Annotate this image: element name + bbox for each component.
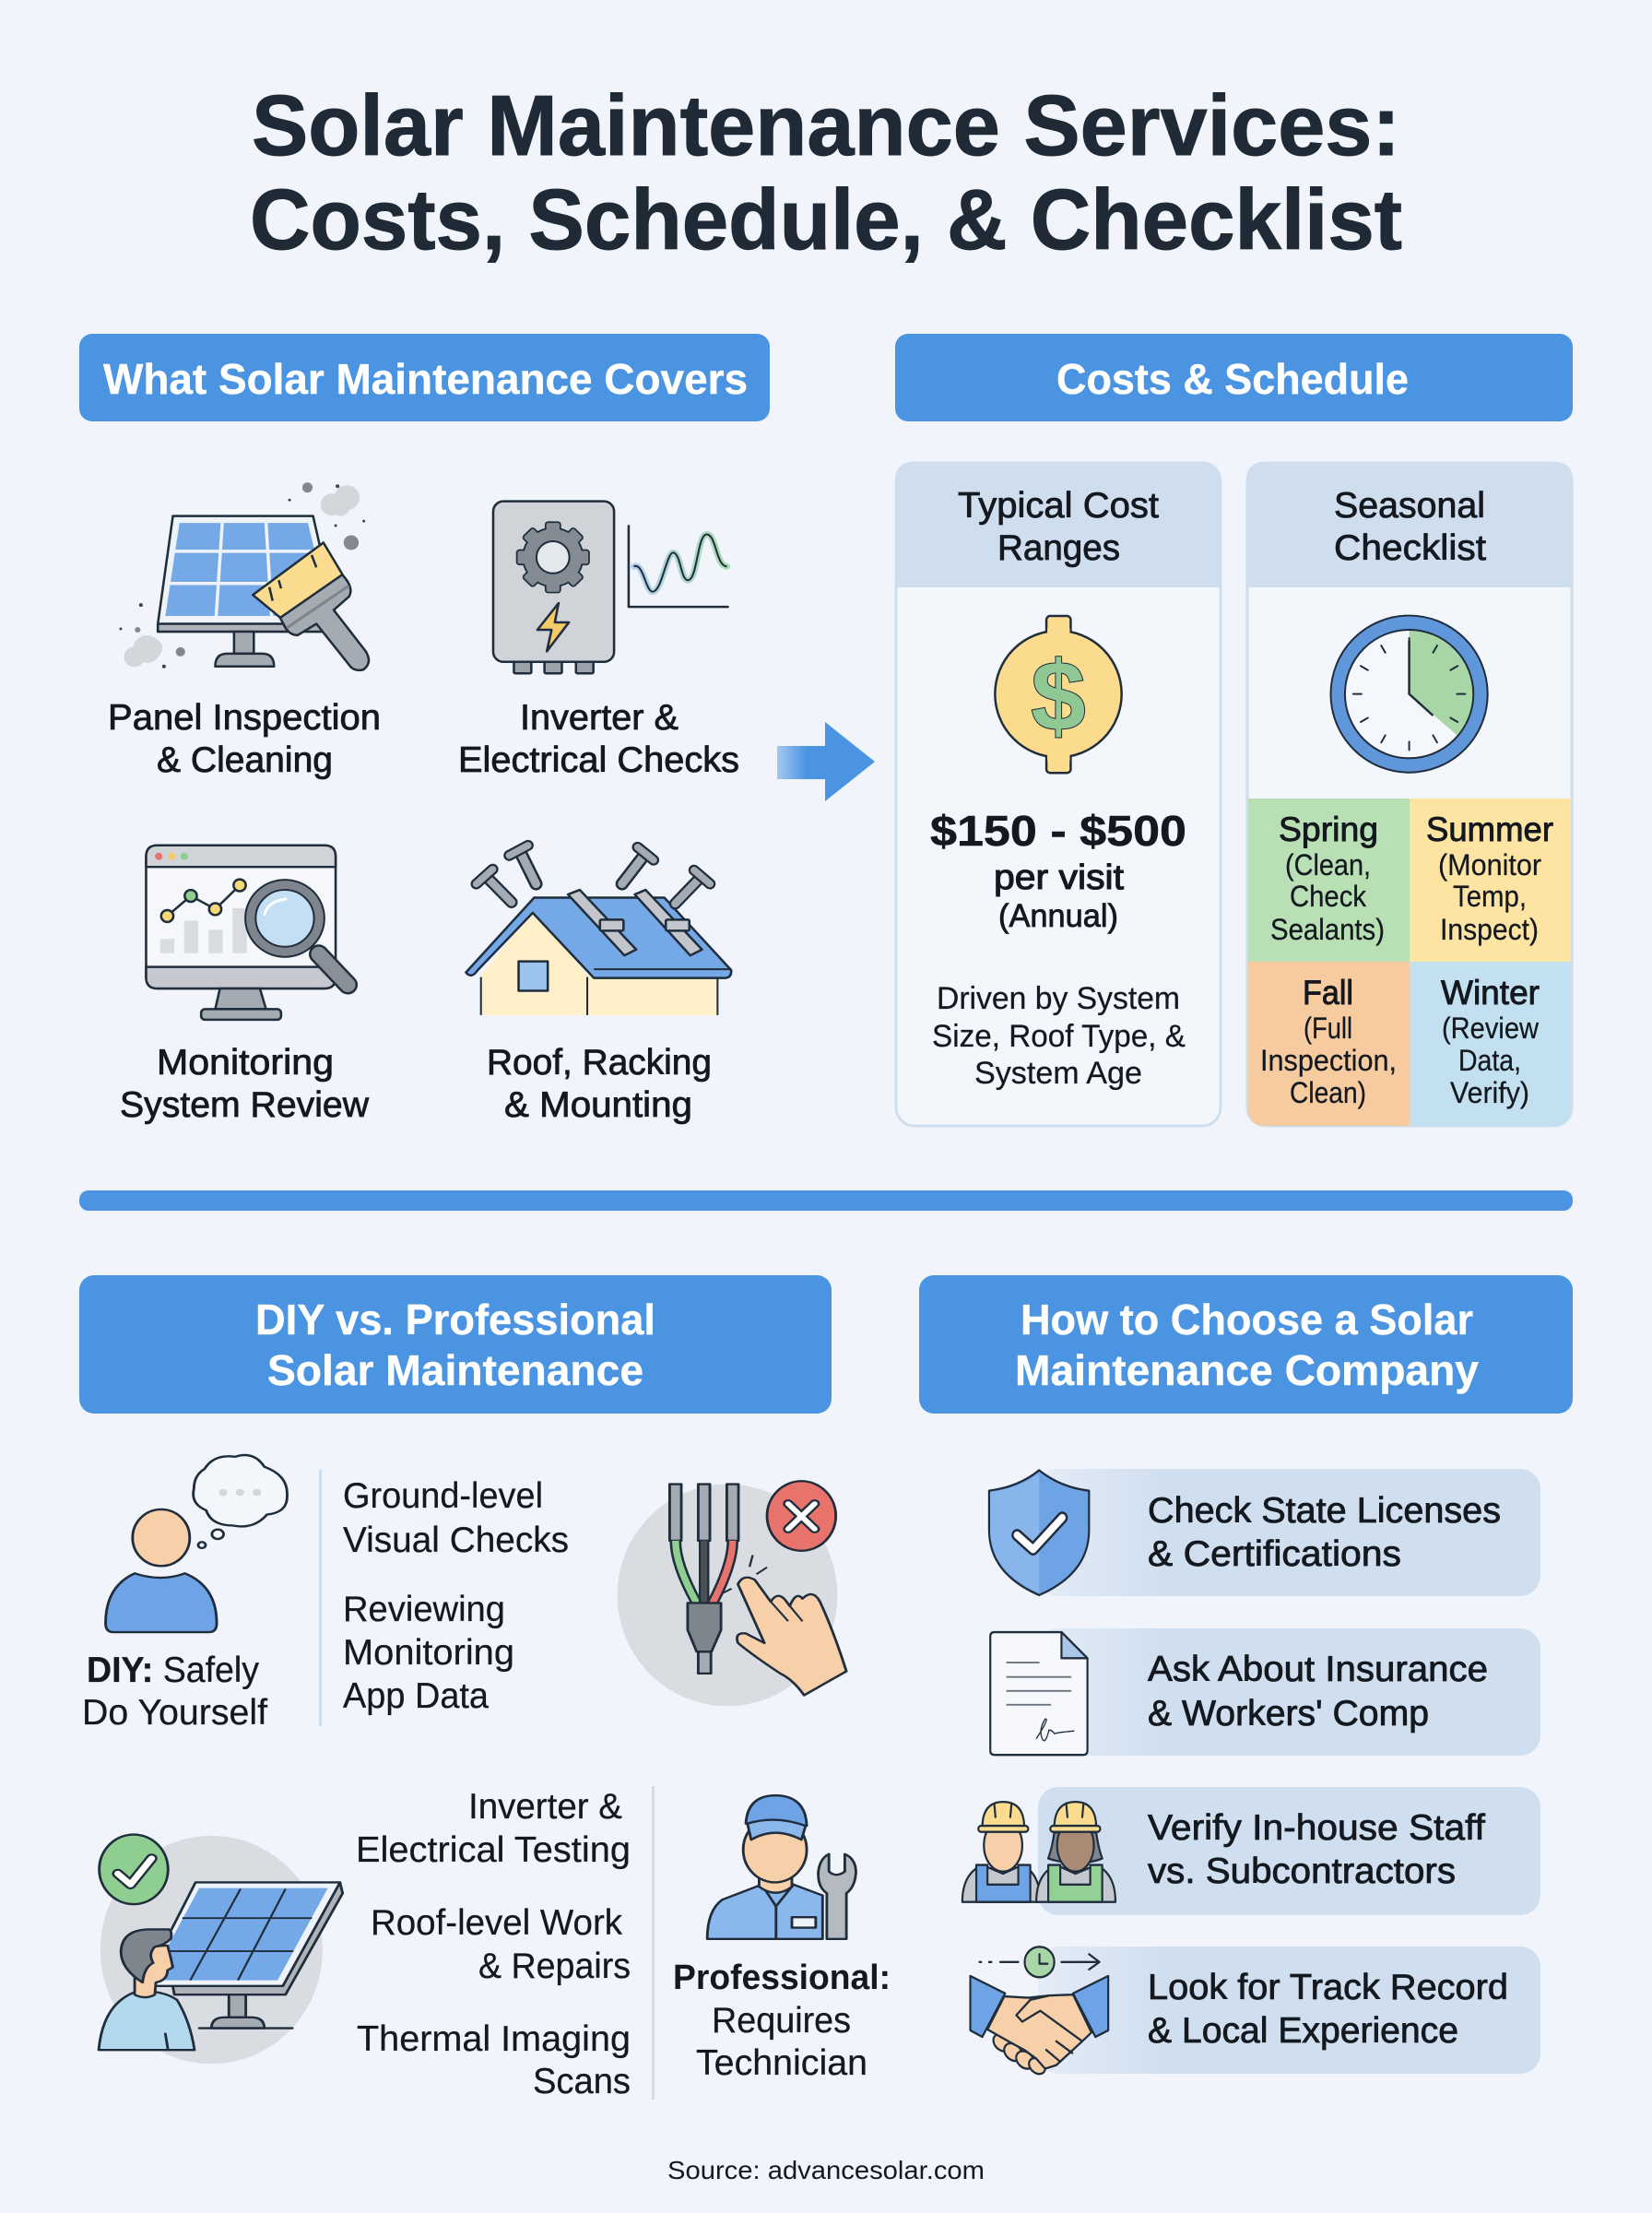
season: spring: (Clean, (1285, 848, 1371, 882)
season: spring: Sealants) (1270, 913, 1385, 946)
row: state licenses (989, 1469, 1540, 1596)
icon: dollar coin: $ (1031, 641, 1086, 751)
season: spring: Spring (1279, 811, 1378, 848)
heading: typical cost (958, 486, 1159, 568)
label: inverter checks: Inverter & (520, 698, 678, 738)
text: licenses (1148, 1491, 1501, 1574)
price (930, 807, 1186, 934)
row: staff (962, 1787, 1540, 1915)
list: diy tasks: Monitoring (343, 1633, 514, 1673)
source: Source: advancesolar.com (667, 2156, 985, 2184)
label: inverter checks (458, 698, 739, 780)
panel: seasonal checklist (1246, 462, 1573, 1126)
heading: how to choose: Maintenance Company (1015, 1346, 1479, 1394)
list: diy tasks: Ground-level (343, 1476, 543, 1516)
text: track record: & Local Experience (1148, 2011, 1458, 2051)
label: roof racking: Roof, Racking (487, 1043, 712, 1083)
heading: what solar maintenance covers (79, 334, 770, 421)
label: roof racking: & Mounting (504, 1085, 692, 1125)
title: Solar Maintenance Services: (252, 77, 1400, 173)
heading: costs and schedule (895, 334, 1573, 421)
list: professional tasks: Electrical Testing (356, 1830, 631, 1870)
cost drivers (932, 981, 1186, 1091)
heading: diy vs professional: DIY vs. Professional (255, 1296, 655, 1343)
heading: typical cost: Typical Cost (958, 486, 1159, 526)
list: professional tasks: & Repairs (478, 1947, 631, 1986)
text: staff: vs. Subcontractors (1148, 1852, 1456, 1891)
cost drivers: System Age (974, 1056, 1142, 1091)
text: licenses: Check State Licenses (1148, 1491, 1501, 1531)
heading: diy vs professional (79, 1275, 832, 1414)
label: inverter checks: Electrical Checks (458, 740, 739, 780)
label: monitoring review: System Review (120, 1085, 370, 1125)
list: professional tasks: Scans (533, 2062, 631, 2101)
heading: costs and schedule: Costs & Schedule (1056, 355, 1409, 403)
icon: roof with rails and screws (466, 846, 731, 1015)
icon: person checking panel (99, 1835, 343, 2064)
heading: how to choose: How to Choose a Solar (1021, 1296, 1473, 1343)
cost drivers: Size, Roof Type, & (932, 1019, 1186, 1054)
icon: person thinking (106, 1455, 287, 1632)
text: insurance: & Workers' Comp (1148, 1694, 1429, 1734)
list: diy tasks: Reviewing (343, 1590, 505, 1629)
icon: shield check (989, 1470, 1089, 1595)
label: panel inspection: & Cleaning (157, 740, 333, 780)
row: track record (971, 1947, 1540, 2077)
season: spring: Check (1290, 880, 1367, 913)
label: diy: DIY: Safely (87, 1651, 259, 1690)
text: track record: Look for Track Record (1148, 1968, 1508, 2007)
icon: technician with wrench (707, 1795, 856, 1939)
label: professional (673, 1959, 891, 2083)
season: winter: Winter (1441, 974, 1540, 1012)
label: monitoring review (120, 1043, 370, 1125)
season: summer: Summer (1426, 811, 1553, 848)
icon: wires and hand with x (618, 1481, 846, 1706)
text: insurance: Ask About Insurance (1148, 1650, 1488, 1689)
text: licenses: & Certifications (1148, 1534, 1401, 1574)
season: summer: Temp, (1453, 880, 1527, 913)
list: diy tasks (343, 1476, 569, 1716)
label: monitoring review: Monitoring (157, 1043, 334, 1083)
text: staff (1148, 1808, 1485, 1891)
icon: two workers (962, 1802, 1115, 1902)
heading: how to choose (919, 1275, 1573, 1414)
list: professional tasks: Inverter & (468, 1787, 622, 1827)
list: professional tasks (356, 1787, 631, 2101)
season: fall: (Full (1304, 1012, 1352, 1045)
season: winter (1410, 962, 1571, 1126)
season: summer: (Monitor (1438, 848, 1541, 882)
label: diy: Do Yourself (82, 1693, 267, 1733)
price: (Annual) (998, 898, 1118, 934)
row: insurance (990, 1628, 1540, 1756)
label: professional: Professional: (673, 1959, 891, 1997)
label: professional: Requires (712, 2001, 851, 2041)
list: professional tasks: Roof-level Work (371, 1903, 622, 1943)
season: fall: Inspection, (1260, 1044, 1397, 1077)
heading: seasonal: Seasonal (1334, 486, 1485, 526)
panel: what maintenance covers (108, 482, 739, 1125)
season: fall: Clean) (1290, 1076, 1366, 1109)
season: winter: (Review (1442, 1012, 1540, 1045)
heading: what solar maintenance covers: What Solar Maintenance Covers (103, 355, 748, 403)
icon: dollar coin (995, 616, 1122, 773)
panel: professional (99, 1786, 891, 2101)
text: track record (1148, 1968, 1508, 2051)
heading: typical cost: Ranges (997, 528, 1120, 568)
icon: handshake with timeline (971, 1947, 1108, 2077)
season: spring (1248, 799, 1410, 962)
season: winter: Data, (1458, 1044, 1521, 1077)
arrow (777, 722, 875, 801)
text: insurance (1148, 1650, 1488, 1734)
season: fall (1248, 962, 1410, 1126)
label: panel inspection (108, 698, 381, 780)
heading: seasonal: Checklist (1334, 528, 1486, 568)
price: $150 - $500 (930, 807, 1186, 855)
season: winter: Verify) (1450, 1076, 1529, 1109)
list: diy tasks: App Data (343, 1676, 489, 1716)
title: Costs, Schedule, & Checklist (250, 172, 1402, 267)
text: staff: Verify In-house Staff (1148, 1808, 1485, 1848)
icon: solar panel with brush (119, 482, 369, 670)
season: summer (1410, 799, 1571, 962)
cost drivers: Driven by System (937, 981, 1180, 1016)
list: diy tasks: Visual Checks (343, 1521, 569, 1560)
label: diy (82, 1651, 267, 1733)
heading: seasonal (1334, 486, 1486, 568)
season: fall: Fall (1303, 974, 1353, 1012)
panel: how to choose list (962, 1469, 1540, 2077)
label: roof racking (487, 1043, 712, 1125)
season: summer: Inspect) (1440, 913, 1539, 946)
heading: diy vs professional: Solar Maintenance (267, 1346, 643, 1394)
panel: diy (82, 1455, 846, 1733)
label: panel inspection: Panel Inspection (108, 698, 381, 738)
icon: inverter and waveform (493, 502, 728, 673)
price: per visit (994, 858, 1124, 897)
title (250, 77, 1402, 267)
icon: monitor with magnifier (146, 846, 348, 1020)
panel: typical cost ranges (895, 462, 1221, 1126)
icon: clock (1331, 616, 1488, 773)
label: professional: Technician (696, 2043, 867, 2083)
icon: signed document (990, 1632, 1088, 1755)
list: professional tasks: Thermal Imaging (357, 2019, 631, 2059)
